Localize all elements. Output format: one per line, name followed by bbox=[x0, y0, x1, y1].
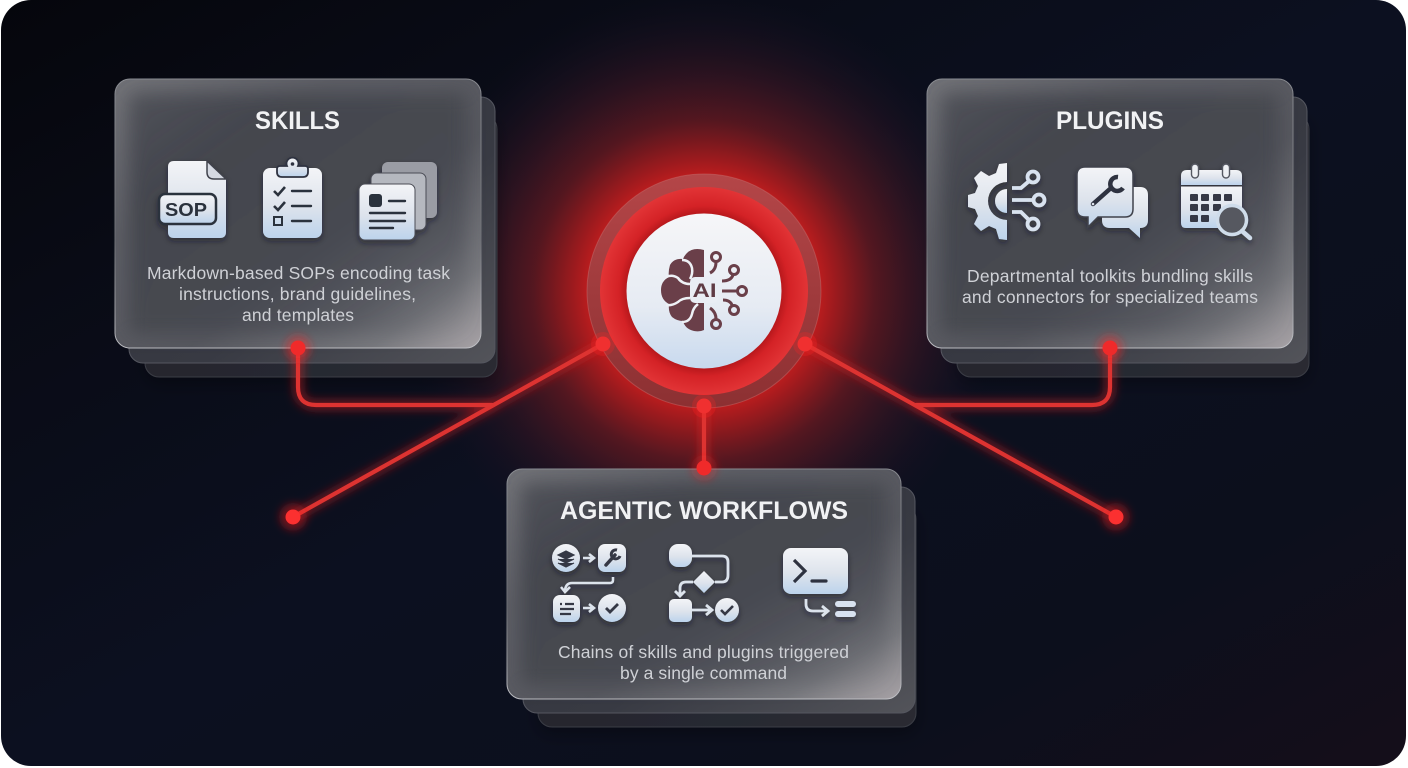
icon: skill chain bbox=[552, 544, 626, 622]
icon: SOP document: SOP bbox=[165, 199, 207, 220]
connector glow bbox=[293, 344, 1116, 517]
panel: skills bbox=[115, 79, 481, 348]
description: agentic workflows bbox=[558, 642, 849, 683]
panel stack backs: agentic workflows bbox=[523, 487, 916, 727]
white disc bbox=[626, 214, 782, 368]
icon: terminal command bbox=[783, 548, 856, 617]
panel: plugins bbox=[927, 79, 1293, 348]
connector nodes bbox=[279, 332, 1130, 531]
description: skills bbox=[147, 263, 450, 325]
central red glow bbox=[404, 0, 1004, 591]
description: skills: instructions, brand guidelines, bbox=[179, 284, 416, 304]
description: skills: and templates bbox=[242, 305, 354, 325]
heading: plugins: PLUGINS bbox=[1056, 107, 1164, 135]
icon: chat bubbles with wrench bbox=[1077, 167, 1148, 238]
panel stack backs: skills bbox=[129, 97, 497, 377]
description: plugins: and connectors for specialized teams bbox=[962, 287, 1258, 307]
panel: agentic workflows bbox=[507, 469, 901, 699]
heading: skills: SKILLS bbox=[255, 107, 340, 135]
heading: agentic workflows: AGENTIC WORKFLOWS bbox=[560, 497, 848, 525]
icon: AI brain: AI bbox=[692, 281, 716, 302]
panel stack backs: plugins bbox=[941, 97, 1309, 377]
icon: checklist clipboard bbox=[263, 158, 322, 238]
description: plugins bbox=[962, 266, 1258, 307]
icon: stacked templates bbox=[359, 162, 437, 240]
connector lines bbox=[293, 344, 1116, 517]
icon: flowchart bbox=[669, 544, 739, 622]
description: skills: Markdown-based SOPs encoding task bbox=[147, 263, 450, 283]
red ring bbox=[600, 187, 808, 395]
icon: AI brain bbox=[661, 249, 746, 331]
icon: gear circuit bbox=[968, 163, 1044, 240]
description: agentic workflows: by a single command bbox=[620, 663, 787, 683]
icon: SOP document bbox=[159, 161, 226, 238]
central AI hub bbox=[587, 174, 821, 408]
description: agentic workflows: Chains of skills and plugins triggered bbox=[558, 642, 849, 662]
outer translucent ring bbox=[587, 174, 821, 408]
icon: calendar search bbox=[1181, 164, 1250, 238]
description: plugins: Departmental toolkits bundling skills bbox=[967, 266, 1253, 286]
